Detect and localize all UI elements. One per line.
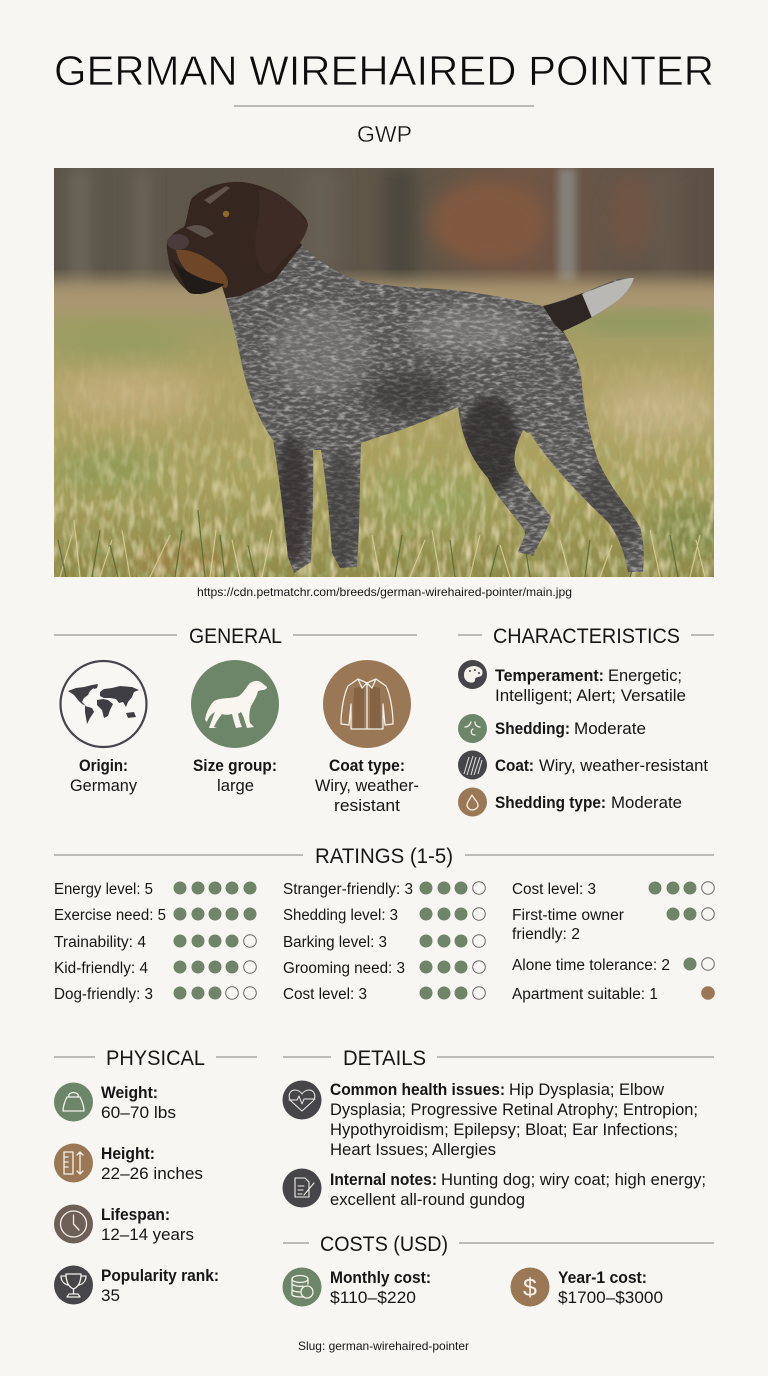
stat: weight: 60–70 lbs [101, 1104, 176, 1122]
stat: weight: Weight: [101, 1084, 158, 1102]
stat: coat type: resistant [334, 797, 400, 815]
panel: characteristics [458, 625, 714, 816]
heading: details: DETAILS [343, 1047, 426, 1070]
text: shedding type: Moderate [611, 794, 682, 812]
footer slug: Slug: german-wirehaired-pointer [298, 1339, 469, 1353]
stat: year-1 cost [558, 1269, 663, 1307]
icon: temperament palette [458, 660, 487, 689]
stat: size group: large [217, 777, 254, 795]
icon: health heart [282, 1080, 322, 1120]
ratings column 2 [283, 881, 485, 1003]
text: temperament: Intelligent; Alert; Versatile [495, 687, 686, 705]
stat: coat type [315, 757, 419, 815]
dog [160, 170, 650, 580]
ratings column 3: Alone time tolerance: 2 [512, 957, 670, 974]
ratings column 2: Grooming need: 3 [283, 960, 405, 977]
icon: coat hair [458, 750, 487, 780]
ratings column 1: Exercise need: 5 [54, 907, 166, 924]
text: shedding type [495, 794, 682, 812]
text: common health issues: Hip Dysplasia; Elbow [509, 1081, 664, 1099]
heading: physical: PHYSICAL [106, 1047, 205, 1070]
text: shedding: Shedding: [495, 720, 570, 738]
stat: height [101, 1145, 203, 1183]
text: shedding [495, 720, 646, 738]
ratings column 2: Stranger-friendly: 3 [283, 881, 413, 898]
icon: notes [282, 1168, 322, 1208]
text: temperament [495, 667, 686, 705]
stat: coat type: Wiry, weather- [315, 777, 419, 795]
text: internal notes: Internal notes: [330, 1171, 437, 1189]
stat: origin: Origin: [79, 757, 128, 775]
stat: size group: Size group: [193, 757, 277, 775]
stat: popularity rank: 35 [101, 1287, 120, 1305]
icon: weight [54, 1082, 93, 1122]
text: common health issues: Heart Issues; Allergies [330, 1141, 496, 1159]
photo background [54, 168, 714, 577]
text: temperament: Energetic; [608, 667, 682, 685]
stat: year-1 cost: $1700–$3000 [558, 1289, 663, 1307]
text: temperament: Temperament: [495, 667, 604, 685]
icon: world map [60, 661, 146, 747]
stat: origin: Germany [70, 777, 138, 795]
stat: weight [101, 1084, 176, 1122]
text: common health issues: Dysplasia; Progressive Retinal Atrophy; Entropion; [330, 1101, 698, 1119]
image url caption: https://cdn.petmatchr.com/breeds/german-wirehaired-pointer/main.jpg [197, 585, 572, 599]
stat: popularity rank: Popularity rank: [101, 1267, 219, 1285]
icon: monthly cost coins [282, 1268, 322, 1306]
ratings column 3: Apartment suitable: 1 [512, 986, 658, 1003]
panel: physical [54, 1047, 257, 1305]
icon: dog silhouette [191, 660, 279, 748]
stat: monthly cost: $110–$220 [330, 1289, 416, 1307]
ratings column 2: Barking level: 3 [283, 934, 387, 951]
text: coat: Wiry, weather-resistant [539, 757, 708, 775]
dog ear [255, 190, 308, 273]
text: internal notes: excellent all-round gundog [330, 1191, 525, 1209]
ratings column 3 [512, 881, 715, 1003]
icon: year-1 cost dollar: $ [523, 1274, 537, 1302]
ratings column 3: First-time owner [512, 907, 624, 924]
heading: ratings: RATINGS (1-5) [315, 845, 453, 868]
icon: shedding type drop [458, 788, 487, 816]
heading: general: GENERAL [189, 625, 282, 648]
ratings column 1: Dog-friendly: 3 [54, 986, 153, 1003]
ratings column 1: Trainability: 4 [54, 934, 146, 951]
stat: monthly cost [330, 1269, 431, 1307]
icon: coat jacket [323, 660, 411, 748]
text: internal notes [330, 1171, 706, 1209]
stat: lifespan [101, 1206, 194, 1244]
panel: general [54, 625, 419, 815]
stat: origin [70, 757, 138, 795]
panel: ratings [54, 845, 715, 1003]
text: common health issues [330, 1081, 698, 1159]
heading: characteristics: CHARACTERISTICS [493, 625, 680, 648]
heading: costs: COSTS (USD) [320, 1233, 448, 1256]
icon: lifespan clock [54, 1204, 93, 1244]
stat: monthly cost: Monthly cost: [330, 1269, 431, 1287]
stat: lifespan: 12–14 years [101, 1226, 194, 1244]
ratings column 2: Shedding level: 3 [283, 907, 398, 924]
subtitle: GWP [357, 121, 412, 147]
ratings column 3: friendly: 2 [512, 926, 580, 943]
text: common health issues: Hypothyroidism; Epilepsy; Bloat; Ear Infections; [330, 1121, 678, 1139]
icon: year-1 cost dollar [510, 1268, 550, 1306]
text: coat: Coat: [495, 757, 534, 775]
text: shedding: Moderate [574, 720, 646, 738]
stat: size group [193, 757, 277, 795]
text: common health issues: Common health issues: [330, 1081, 505, 1099]
text: shedding type: Shedding type: [495, 794, 606, 812]
ratings column 1: Kid-friendly: 4 [54, 960, 148, 977]
ratings column 1 [54, 881, 256, 1003]
ratings column 3: Cost level: 3 [512, 881, 596, 898]
panel: details [282, 1047, 714, 1209]
dog eye [223, 211, 229, 217]
stat: height: 22–26 inches [101, 1165, 203, 1183]
ratings column 2: Cost level: 3 [283, 986, 367, 1003]
photo: dog in field [54, 168, 714, 577]
stat: popularity rank [101, 1267, 219, 1305]
stat: coat type: Coat type: [329, 757, 405, 775]
stat: height: Height: [101, 1145, 155, 1163]
panel: costs [282, 1233, 714, 1307]
dog nose [167, 234, 189, 250]
title: GERMAN WIREHAIRED POINTER [54, 47, 714, 94]
stat: year-1 cost: Year-1 cost: [558, 1269, 647, 1287]
ratings column 1: Energy level: 5 [54, 881, 153, 898]
text: internal notes: Hunting dog; wiry coat; high energy; [441, 1171, 706, 1189]
stat: lifespan: Lifespan: [101, 1206, 170, 1224]
icon: popularity trophy [54, 1266, 93, 1304]
icon: height [54, 1144, 93, 1182]
icon: shedding [458, 714, 487, 743]
